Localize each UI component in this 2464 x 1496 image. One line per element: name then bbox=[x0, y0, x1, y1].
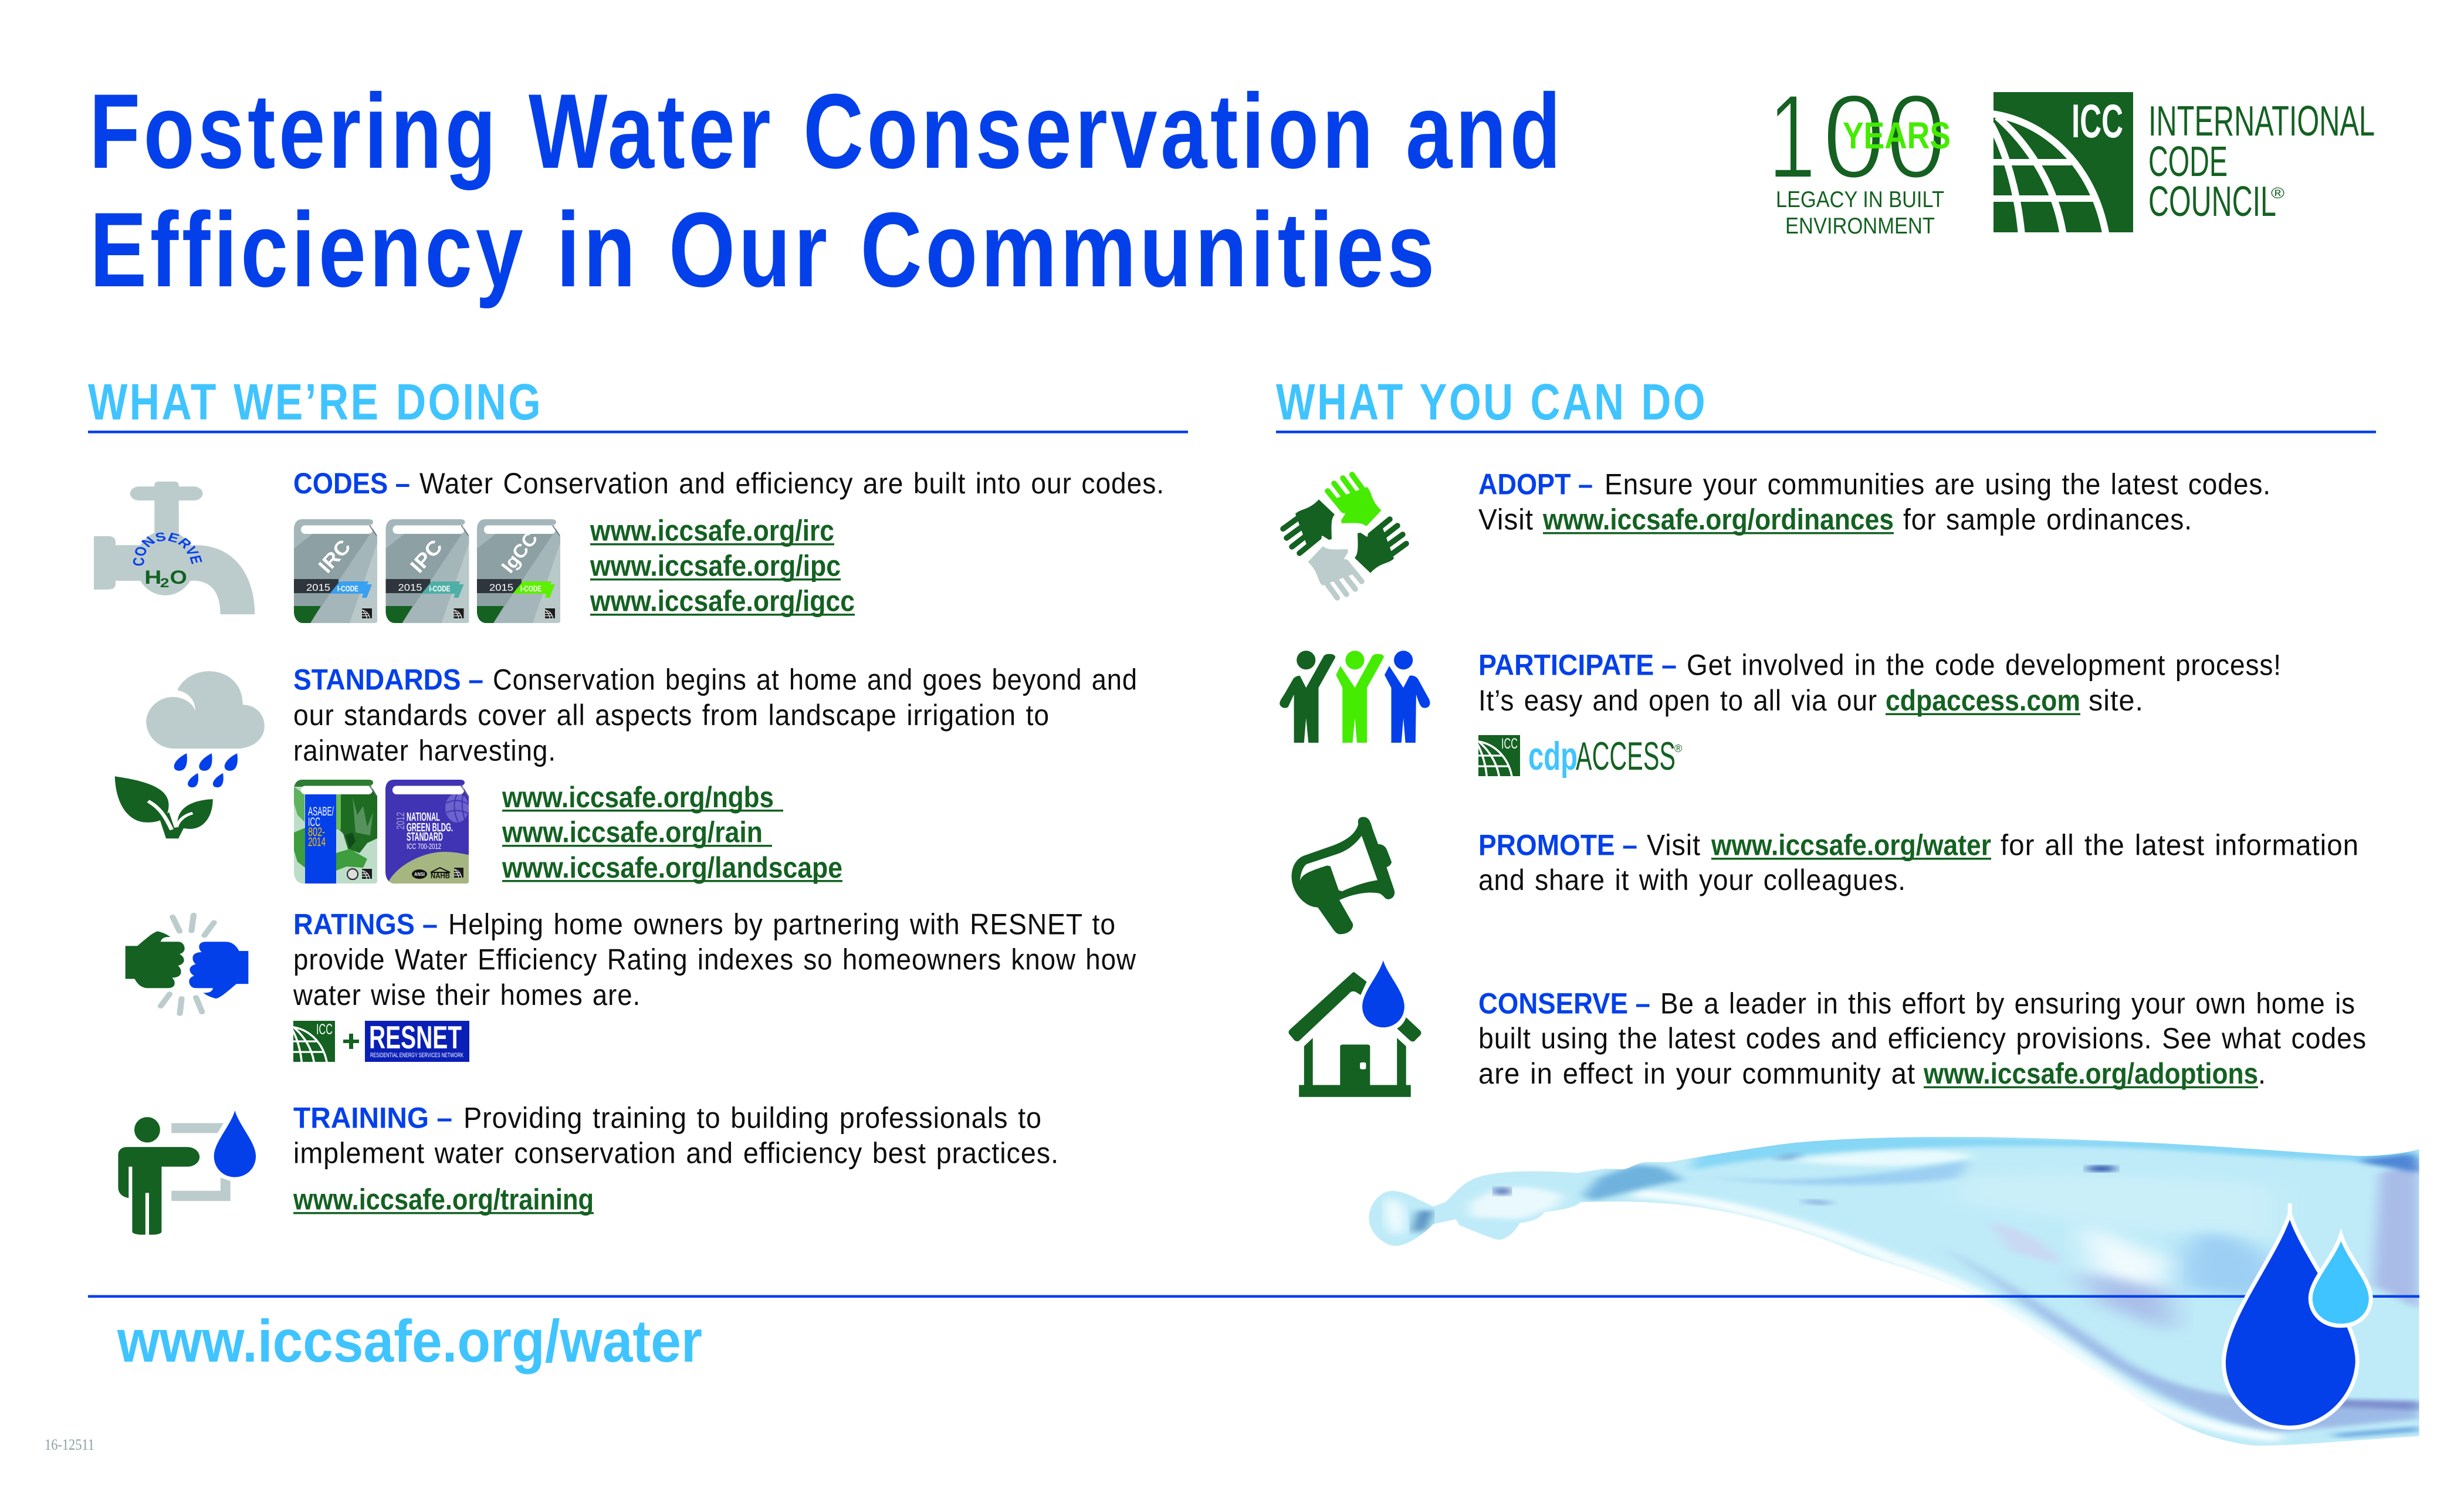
icon: faucet conserve H2O: O bbox=[170, 566, 187, 588]
book: National Green Building Standard: NATIONAL bbox=[407, 811, 440, 824]
text: conserve: built using the latest codes and efficiency provisions. See what codes bbox=[1478, 1022, 2367, 1055]
text: conserve: www.iccsafe.org/adoptions bbox=[1923, 1057, 2258, 1090]
title: Efficiency in Our Communities bbox=[90, 191, 1438, 309]
text: conserve bbox=[1478, 987, 2367, 1090]
icon: house with water drop bbox=[1289, 960, 1421, 1097]
text: ratings: water wise their homes are. bbox=[293, 979, 641, 1011]
logos: ICC plus RESNET: RESNET bbox=[369, 1019, 462, 1055]
text: participate: It’s easy and open to all via our bbox=[1478, 684, 1877, 717]
book: IRC bbox=[294, 519, 377, 623]
book: National Green Building Standard: NAHB bbox=[431, 871, 450, 880]
icon: rain cloud and plant bbox=[115, 671, 265, 838]
book: IPC: IPC bbox=[406, 536, 447, 577]
icon: faucet conserve H2O: CONSERVE bbox=[133, 533, 202, 566]
text: adopt: Ensure your communities are using the latest codes. bbox=[1605, 468, 2271, 501]
logo: 100 years legacy: 0 bbox=[1886, 70, 1947, 204]
text: training: Providing training to building professionals to bbox=[463, 1102, 1042, 1135]
text: promote bbox=[1478, 828, 2359, 896]
logos: ICC plus RESNET: ICC bbox=[316, 1021, 333, 1038]
book: IgCC bbox=[477, 519, 560, 623]
text: codes: Water Conservation and efficiency are built into our codes. bbox=[419, 467, 1165, 500]
text: codes: CODES – bbox=[293, 467, 410, 500]
text: participate: site. bbox=[2089, 684, 2144, 717]
text: training bbox=[293, 1102, 1059, 1170]
logo: 100 years legacy bbox=[1768, 70, 1951, 239]
logo: 100 years legacy: ENVIRONMENT bbox=[1785, 214, 1935, 239]
water splash bbox=[1369, 1137, 2419, 1446]
text: promote: and share it with your colleagues. bbox=[1478, 864, 1906, 896]
links: standards: www.iccsafe.org/rain bbox=[502, 815, 763, 848]
logo: International Code Council: COUNCIL bbox=[2148, 178, 2276, 225]
book: National Green Building Standard: GREEN BLDG. bbox=[407, 821, 453, 834]
logo: cdpACCESS: cdp bbox=[1528, 734, 1578, 779]
logo: cdpACCESS: ICC bbox=[1501, 736, 1518, 752]
book: IRC: IRC bbox=[314, 536, 355, 577]
text: adopt: ADOPT – bbox=[1478, 468, 1593, 501]
links: codes: www.iccsafe.org/ipc bbox=[590, 550, 841, 583]
book: National Green Building Standard: ANSI bbox=[414, 872, 425, 877]
icon: three people bbox=[1280, 651, 1430, 743]
logo: International Code Council bbox=[1991, 92, 2375, 236]
text: participate: cdpaccess.com bbox=[1886, 684, 2080, 717]
text: promote: www.iccsafe.org/water bbox=[1711, 828, 1991, 861]
logo: International Code Council: ® bbox=[2271, 184, 2284, 202]
water drops bbox=[2223, 1203, 2371, 1427]
book: IPC: 2015 bbox=[398, 582, 422, 593]
logo: cdpACCESS: ® bbox=[1674, 743, 1682, 754]
logo: 100 years legacy: 1 bbox=[1768, 70, 1816, 204]
book: National Green Building Standard: STANDARD bbox=[407, 831, 443, 844]
text: conserve: Be a leader in this effort by ensuring your own home is bbox=[1660, 987, 2355, 1020]
book: IgCC: 2015 bbox=[489, 582, 513, 593]
text: participate bbox=[1478, 649, 2282, 717]
links: codes: www.iccsafe.org/igcc bbox=[590, 585, 855, 618]
links: codes bbox=[590, 515, 855, 618]
icon: megaphone bbox=[1292, 817, 1395, 934]
text: promote: PROMOTE – bbox=[1478, 828, 1637, 861]
links: codes: www.iccsafe.org/irc bbox=[590, 515, 834, 547]
logo: 100 years legacy: LEGACY IN BUILT bbox=[1776, 187, 1944, 212]
icon: trainer with water drop bbox=[118, 1111, 256, 1235]
text: standards: Conservation begins at home and goes beyond and bbox=[493, 663, 1138, 696]
book: IgCC: IgCC bbox=[497, 528, 542, 577]
text: conserve: are in effect in your community at bbox=[1478, 1057, 1915, 1090]
book: National Green Building Standard: ICC 700-2012 bbox=[407, 842, 441, 851]
text: ratings: RATINGS – bbox=[293, 908, 438, 941]
logo: 100 years legacy: YEARS bbox=[1843, 114, 1951, 157]
text: standards: our standards cover all aspects from landscape irrigation to bbox=[293, 699, 1050, 732]
book: IgCC: I-CODE bbox=[520, 584, 541, 593]
text: adopt: Visit bbox=[1478, 503, 1534, 536]
book: IRC: 2015 bbox=[306, 582, 330, 593]
text: conserve: . bbox=[2258, 1057, 2266, 1090]
text: adopt: for sample ordinances. bbox=[1903, 503, 2192, 536]
logos: ICC plus RESNET: RESIDENTIAL ENERGY SERVICES NETWORK bbox=[370, 1052, 463, 1059]
book: IPC: I-CODE bbox=[429, 584, 451, 593]
book: IRC: I-CODE bbox=[337, 584, 358, 593]
text: promote: Visit bbox=[1647, 828, 1701, 861]
logos: ICC plus RESNET bbox=[293, 1019, 469, 1063]
text: adopt: www.iccsafe.org/ordinances bbox=[1542, 503, 1894, 536]
title bbox=[89, 72, 1564, 309]
text: conserve: CONSERVE – bbox=[1478, 987, 1650, 1020]
icon: faucet conserve H2O bbox=[94, 481, 255, 615]
text: promote: for all the latest information bbox=[2001, 828, 2359, 861]
text: ratings: provide Water Efficiency Rating indexes so homeowners know how bbox=[293, 943, 1136, 976]
book: ASABE/ICC 802-2014: 802- bbox=[308, 825, 325, 839]
icon: fist bump bbox=[126, 915, 248, 1014]
text: participate: PARTICIPATE – bbox=[1478, 649, 1677, 682]
book: ASABE/ICC 802-2014: ICC bbox=[308, 815, 320, 829]
text: training: TRAINING – bbox=[293, 1102, 452, 1135]
logo: cdpACCESS bbox=[1478, 734, 1682, 779]
text: standards: STANDARDS – bbox=[293, 663, 483, 696]
icon: faucet conserve H2O: 2 bbox=[160, 576, 169, 590]
heading: what you can do: WHAT YOU CAN DO bbox=[1276, 374, 1707, 431]
text: training: implement water conservation and efficiency best practices. bbox=[293, 1137, 1059, 1170]
text: ratings: Helping home owners by partnering with RESNET to bbox=[448, 908, 1116, 941]
book: National Green Building Standard bbox=[385, 780, 469, 884]
job number: 16-12511 bbox=[45, 1436, 94, 1453]
links: standards: www.iccsafe.org/landscape bbox=[502, 851, 842, 884]
text: standards: rainwater harvesting. bbox=[293, 735, 556, 767]
logo: 100 years legacy: 0 bbox=[1822, 70, 1886, 204]
icon: four hands bbox=[1283, 475, 1406, 598]
text: participate: Get involved in the code development process! bbox=[1687, 649, 2282, 682]
title: Fostering Water Conservation and bbox=[89, 72, 1564, 191]
heading: what we're doing: WHAT WE’RE DOING bbox=[88, 374, 543, 431]
logo: International Code Council: CODE bbox=[2148, 138, 2228, 185]
heading: what you can do bbox=[1276, 374, 2376, 433]
text: standards bbox=[293, 663, 1138, 767]
footer rule bbox=[88, 1295, 2419, 1298]
book: National Green Building Standard: 2012 bbox=[395, 812, 407, 830]
heading: what we're doing bbox=[88, 374, 1188, 433]
book: ASABE/ICC 802-2014: ASABE/ bbox=[308, 805, 334, 818]
links: standards bbox=[502, 781, 842, 884]
text: ratings bbox=[293, 908, 1136, 1011]
links: standards: www.iccsafe.org/ngbs bbox=[502, 781, 774, 814]
icon: faucet conserve H2O: H bbox=[144, 566, 161, 588]
text: adopt bbox=[1478, 468, 2271, 536]
book: ASABE/ICC 802-2014: 2014 bbox=[308, 835, 326, 849]
book: ASABE/ICC 802-2014 bbox=[294, 780, 377, 884]
logo: International Code Council: ICC bbox=[2072, 95, 2123, 148]
footer url: www.iccsafe.org/water bbox=[117, 1308, 702, 1375]
logo: cdpACCESS: ACCESS bbox=[1576, 734, 1676, 779]
link: training: www.iccsafe.org/training bbox=[293, 1183, 594, 1216]
book: IPC bbox=[386, 519, 469, 623]
